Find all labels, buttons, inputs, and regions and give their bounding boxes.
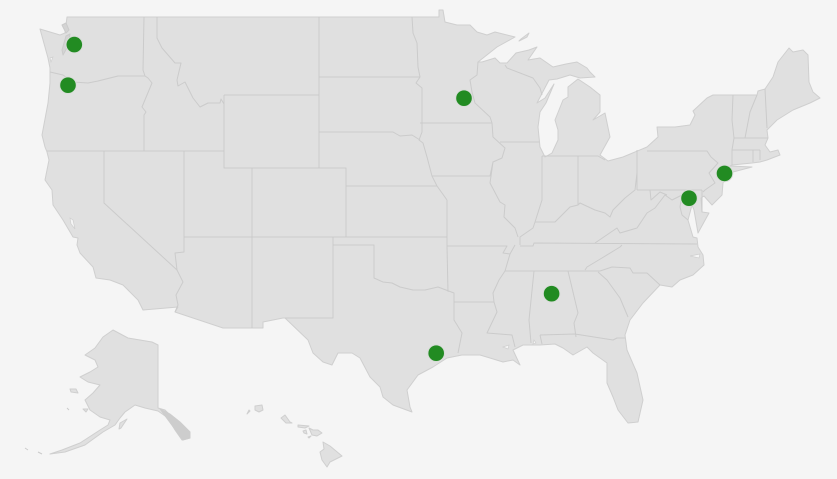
marker: Baltimore area bbox=[681, 190, 697, 206]
marker: New York area bbox=[716, 165, 733, 182]
Great Lakes small islands bbox=[519, 33, 529, 41]
marker: Minneapolis bbox=[456, 90, 472, 106]
marker: Houston bbox=[428, 345, 445, 362]
state border lines bbox=[47, 17, 768, 353]
marker: Portland bbox=[60, 77, 76, 93]
Alaska bbox=[25, 330, 190, 454]
coastal inlets and bays bbox=[50, 57, 700, 349]
marker: Seattle bbox=[66, 36, 83, 53]
Hawaii bbox=[247, 405, 342, 467]
marker: Birmingham bbox=[543, 285, 560, 302]
Puget Sound islands bbox=[62, 23, 70, 55]
location markers bbox=[60, 36, 733, 362]
